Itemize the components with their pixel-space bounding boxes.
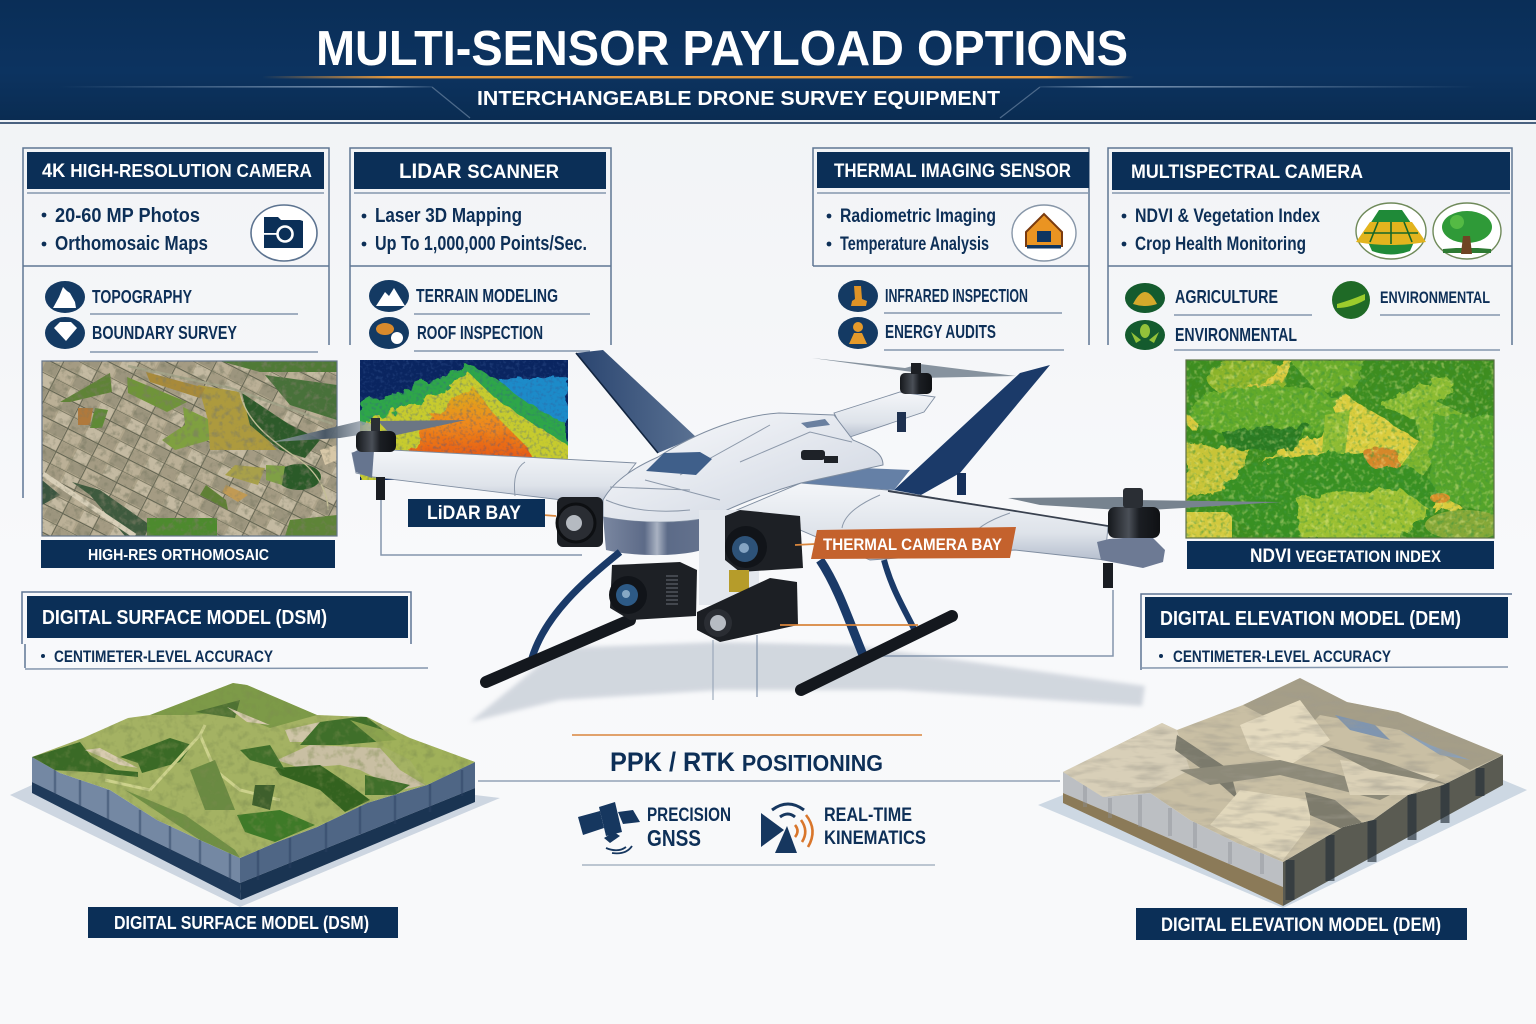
use: topography [45,281,298,314]
drone shadow [470,642,1145,722]
wing: left [352,449,636,505]
wing: right [713,483,1108,560]
propeller: left [272,421,378,442]
propeller: rear [812,358,1016,378]
label: DEM: DIGITAL ELEVATION MODEL (DEM) [1161,915,1441,936]
label: real-time kinematics: REAL-TIME [824,805,912,826]
panel: LiDAR scanner: LIDAR SCANNER [399,160,559,183]
callout: LiDAR bay [408,499,545,527]
motor: front right [1108,488,1160,538]
antenna module [801,450,838,463]
panel: multispectral camera: MULTISPECTRAL CAMERA [1131,161,1363,183]
use: terrain modeling [369,280,590,314]
label: high-res orthomosaic [41,540,335,568]
callout: LiDAR bay: LiDAR BAY [427,503,521,524]
use: boundary survey: BOUNDARY SURVEY [92,323,237,343]
thermal bullets: Temperature Analysis [840,234,989,255]
panel: 4K camera [23,148,329,498]
label: real-time kinematics [824,805,926,849]
frame: orthomosaic [42,361,337,536]
multispectral bullets: NDVI & Vegetation Index [1135,206,1320,227]
terrain: DSM [10,680,500,907]
label: DSM: DIGITAL SURFACE MODEL (DSM) [114,913,369,933]
multispectral bullets [1122,206,1320,255]
wing seam: right [842,495,1010,540]
panel: digital elevation model [1141,594,1512,670]
wing top dark edge [888,491,1108,526]
use: infrared inspection: INFRARED INSPECTION [885,286,1028,306]
motor: left [356,418,396,452]
use: boundary survey [45,317,318,352]
image: LiDAR point cloud [360,360,568,480]
fuselage top [603,413,883,522]
LiDAR bullets: Laser 3D Mapping [375,205,522,227]
right strut front [820,560,866,662]
orange leader line [543,515,918,625]
use: agriculture: AGRICULTURE [1175,287,1278,307]
use: energy audits: ENERGY AUDITS [885,322,996,342]
panel: digital elevation model: DIGITAL ELEVATION MODEL (DEM) [1160,608,1461,630]
drone illustration [272,350,1282,690]
rear arm [834,392,935,438]
fin: rear right [894,365,1050,495]
motor: rear [900,363,932,394]
wing seam: left [514,462,525,496]
right skid [801,616,952,690]
LiDAR bullets: Up To 1,000,000 Points/Sec. [375,233,587,255]
use: roof inspection: ROOF INSPECTION [417,323,543,343]
panel: multispectral camera [1108,148,1512,350]
use: environmental left [1125,320,1500,350]
icon: satellite [578,802,640,853]
fin: rear left [576,350,696,453]
panel: 4K camera: 4K HIGH-RESOLUTION CAMERA [42,161,312,182]
callout lines [381,490,1113,700]
label: DEM [1136,908,1467,940]
callout: thermal camera bay [811,527,1016,559]
section: PPK / RTK positioning [478,735,1060,865]
subtitle: INTERCHANGEABLE DRONE SURVEY EQUIPMENT [477,88,1000,110]
section: PPK / RTK positioning: PPK / RTK POSITIONING [610,747,883,777]
use: infrared inspection [838,280,1062,313]
left landing pin [376,477,385,500]
label: NDVI vegetation index [1187,541,1494,569]
payload column [699,510,759,605]
use: terrain modeling: TERRAIN MODELING [416,286,558,306]
panel: digital surface model [22,592,428,669]
panel: LiDAR scanner [350,148,611,351]
label: DSM [88,907,398,938]
label: precision GNSS: PRECISION [647,805,731,826]
wing tip: right [1097,536,1165,568]
icon: crop field [1356,203,1426,259]
right landing pin [1103,563,1113,588]
image: high-res orthomosaic [42,361,337,536]
body band [603,517,707,555]
fin strut [957,473,966,495]
label: high-res orthomosaic: HIGH-RES ORTHOMOSAIC [88,547,269,564]
payload warning plate [729,570,749,592]
wing tip: left [352,448,374,478]
camera bullets [42,205,208,255]
use: roof inspection [369,317,590,351]
right wing hatch [801,468,910,490]
panel: digital elevation model: CENTIMETER-LEVEL ACCURACY [1173,648,1391,666]
multispectral bullets: Crop Health Monitoring [1135,234,1306,255]
propeller: left right blade [378,420,466,436]
panel: thermal imaging: THERMAL IMAGING SENSOR [834,161,1071,182]
callout: thermal camera bay: THERMAL CAMERA BAY [823,535,1003,554]
use: energy audits [838,317,1064,350]
use: agriculture [1125,283,1312,315]
camera: lower center [697,578,798,642]
label: precision GNSS [647,805,731,851]
right strut rear [884,560,916,633]
rear pin [897,412,906,432]
icon: thermal house [1012,205,1076,261]
panel: thermal imaging [813,148,1089,350]
thermal bullets [827,206,996,255]
use: topography: TOPOGRAPHY [92,287,192,307]
use: environmental left: ENVIRONMENTAL [1175,325,1297,345]
camera bullets: Orthomosaic Maps [55,233,208,255]
top vent [801,419,830,428]
camera: lower left [609,562,697,620]
camera: thermal bay [725,510,803,572]
LiDAR bullets [362,205,587,255]
fin edge: rear left [576,353,658,453]
icon: tree [1433,203,1501,259]
image: NDVI vegetation [1186,358,1505,543]
frame: NDVI [1186,360,1494,538]
label: precision GNSS: GNSS [647,825,701,851]
fuselage panel lines [606,425,852,511]
panel: digital surface model: CENTIMETER-LEVEL ACCURACY [54,648,273,666]
propeller: front right [1008,497,1282,510]
terrain: DEM [1038,676,1527,908]
camera bullets: 20-60 MP Photos [55,205,200,227]
panel: digital surface model: DIGITAL SURFACE MODEL (DSM) [42,607,327,629]
icon: RTK antenna [761,804,813,853]
label: real-time kinematics: KINEMATICS [824,828,926,849]
thermal bullets: Radiometric Imaging [840,206,996,227]
canopy window [646,452,712,475]
left strut [532,552,620,658]
use: environmental right: ENVIRONMENTAL [1380,288,1490,307]
title: MULTI-SENSOR PAYLOAD OPTIONS [316,22,1128,76]
label: NDVI vegetation index: NDVI VEGETATION INDEX [1250,546,1441,567]
left skid [486,620,630,682]
use: environmental right [1332,281,1500,319]
camera: lidar bay [557,497,603,547]
icon: camera [251,205,317,261]
header band [0,0,1536,124]
